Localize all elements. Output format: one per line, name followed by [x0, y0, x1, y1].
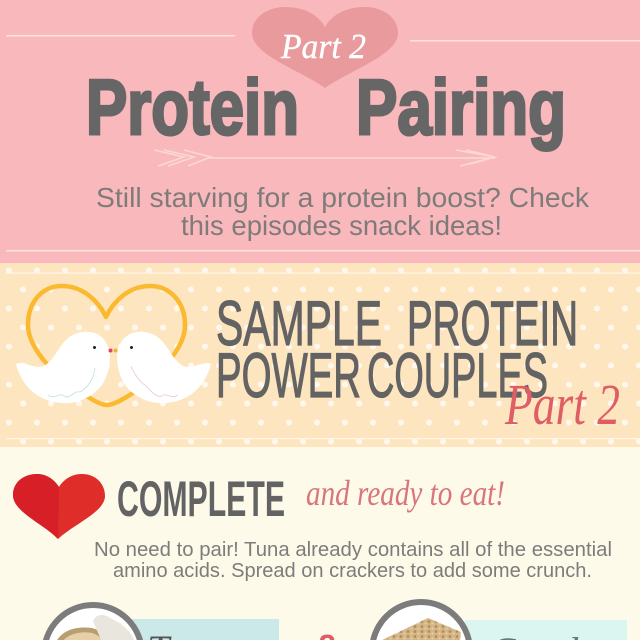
tuna photo circle	[44, 605, 142, 640]
crackers photo circle	[372, 602, 470, 640]
icon: left bird	[16, 332, 112, 403]
script tagline: and ready to eat!	[306, 473, 505, 513]
title: Pairing: Pairing	[356, 63, 566, 151]
arrow divider	[154, 150, 495, 166]
icon: heart outline	[28, 286, 185, 405]
panel: tuna card	[44, 605, 279, 640]
description text: amino acids. Spread on crackers to add some crunch.	[113, 559, 592, 582]
icon: right bird	[114, 332, 211, 403]
badge text: Part 2	[280, 27, 366, 66]
intro text: Still starving for a protein boost? Check	[96, 182, 590, 213]
banner heading: SAMPLE	[216, 289, 382, 359]
heading text: COMPLETE	[117, 471, 285, 527]
title: Protein: Protein	[86, 63, 299, 151]
description text: No need to pair! Tuna already contains all of the essential	[94, 538, 612, 561]
crackers label background	[465, 620, 627, 640]
banner heading: POWER	[216, 341, 361, 411]
icon: heart badge	[252, 7, 398, 88]
tuna label background	[130, 619, 279, 640]
intro text: this episodes snack ideas!	[181, 210, 502, 241]
panel: crackers card	[372, 602, 636, 640]
header rule bottom	[6, 250, 640, 252]
section heading: complete	[13, 471, 505, 539]
panel: yellow banner	[0, 263, 640, 447]
icon: red heart	[13, 474, 105, 539]
panel: pink header	[0, 0, 640, 263]
header rule right	[410, 40, 640, 42]
header rule left	[6, 35, 235, 36]
